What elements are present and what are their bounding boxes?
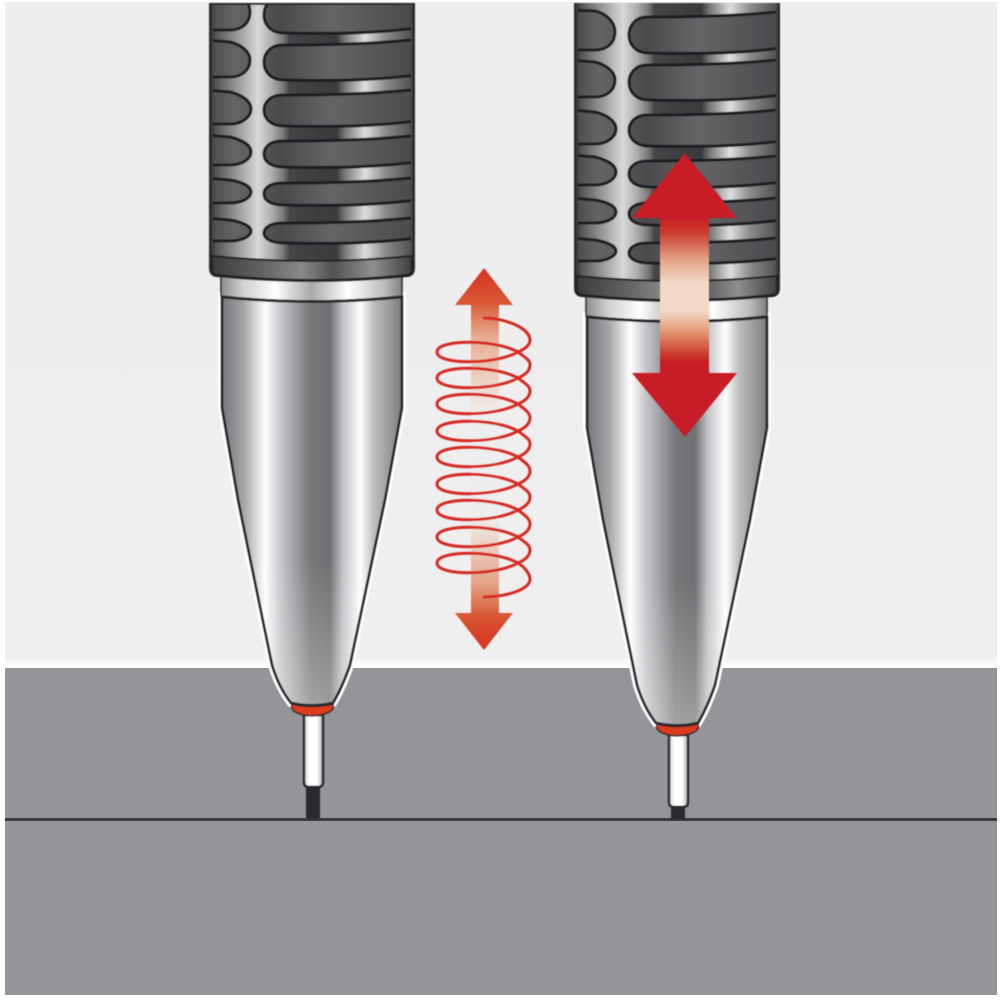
right pencil grip <box>570 0 795 301</box>
right pencil lead <box>669 735 688 819</box>
background <box>5 2 997 668</box>
large double arrow <box>632 153 737 437</box>
left pencil <box>205 0 430 819</box>
small arrow head down <box>455 613 513 650</box>
right pencil barrel <box>586 296 767 736</box>
small arrow shaft <box>471 304 499 614</box>
desk surface <box>5 668 997 995</box>
small double arrow with spring <box>437 268 530 650</box>
large arrow head up <box>632 153 737 218</box>
left pencil barrel <box>221 276 402 716</box>
right pencil <box>570 0 795 819</box>
large arrow shaft <box>660 217 709 374</box>
spring coil <box>437 318 530 597</box>
large arrow head down <box>632 373 737 437</box>
left pencil lead <box>304 715 323 819</box>
small arrow head up <box>455 268 513 305</box>
left pencil grip <box>205 0 430 281</box>
